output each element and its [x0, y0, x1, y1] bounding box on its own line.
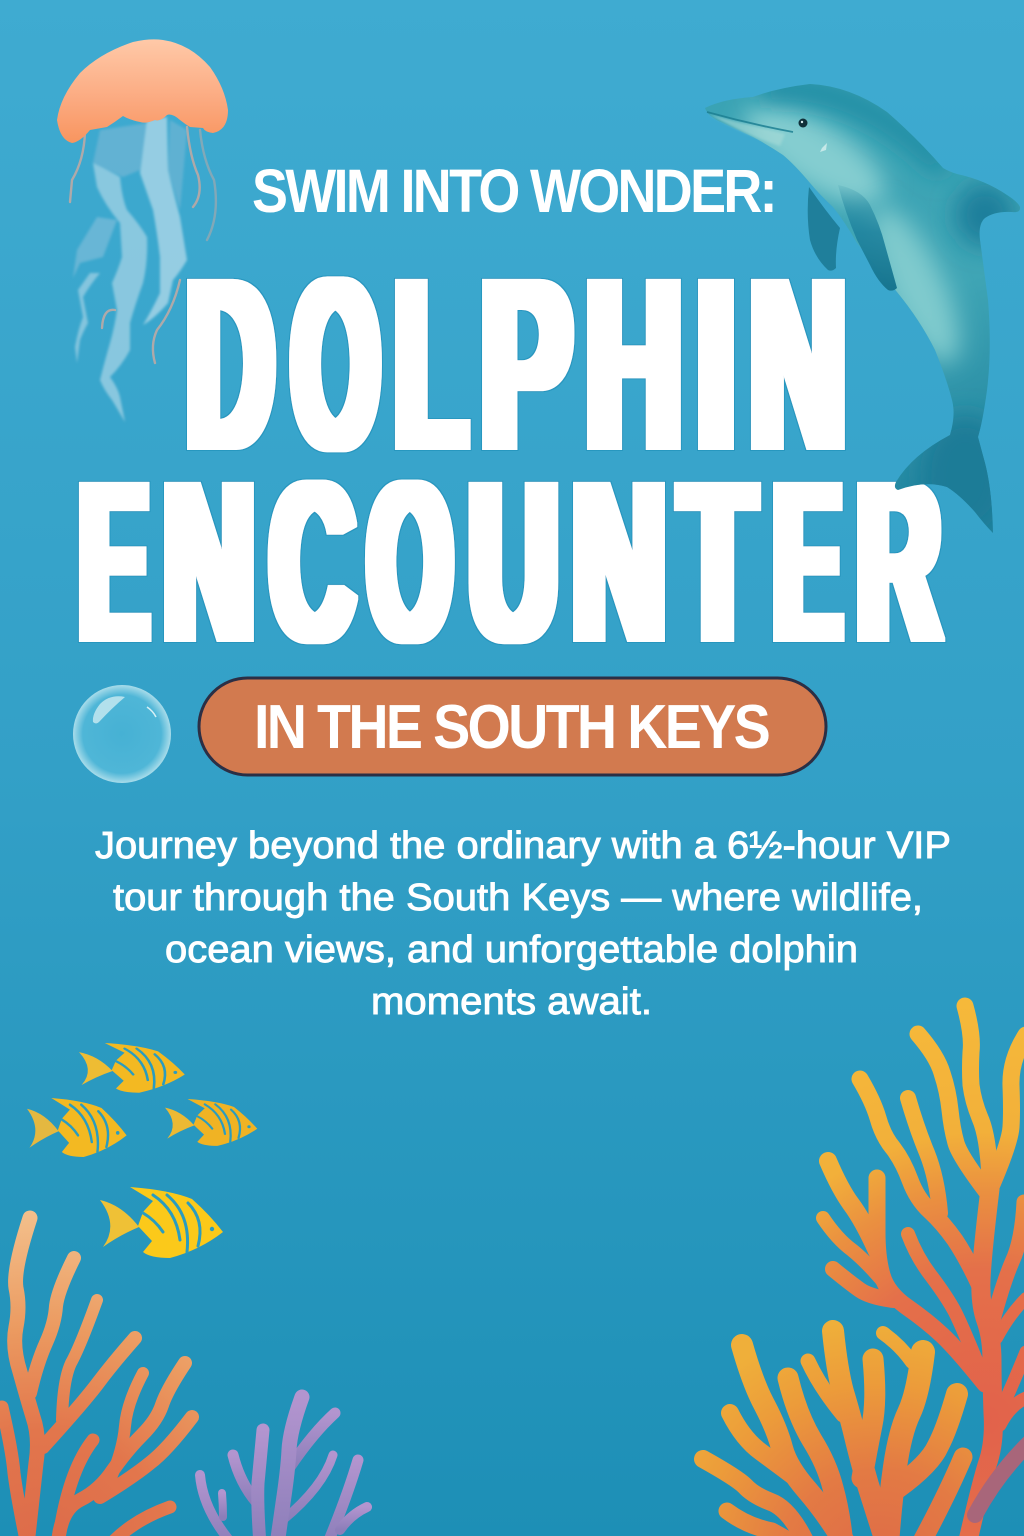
pill label: IN THE SOUTH KEYS: [254, 693, 769, 762]
title: N: [164, 436, 254, 689]
fish 4: [100, 1187, 223, 1258]
description text: tour through the South Keys — where wildlife,: [113, 877, 923, 919]
title: E: [774, 436, 840, 689]
title: E: [80, 436, 148, 689]
subtitle: SWIM INTO WONDER:: [252, 157, 775, 225]
fish 2: [27, 1098, 127, 1157]
description text: ocean views, and unforgettable dolphin: [165, 929, 858, 971]
icon: jellyfish: [57, 39, 228, 422]
icon: dolphin: [705, 84, 1020, 535]
pill: in the south keys: [199, 678, 826, 775]
title: I: [697, 229, 735, 500]
title: N: [572, 436, 666, 689]
fish 1: [79, 1043, 185, 1093]
title: O: [369, 436, 451, 689]
title: R: [857, 436, 940, 689]
title: U: [469, 436, 558, 689]
title: N: [750, 229, 846, 500]
title: [80, 229, 940, 689]
title: P: [481, 229, 571, 500]
coral: lower right: [703, 1331, 963, 1536]
title: T: [680, 436, 754, 689]
icon: bubble: [73, 685, 171, 783]
coral: lower left: [2, 1218, 192, 1536]
fish school: [27, 1043, 257, 1258]
title: C: [271, 436, 353, 689]
title: L: [395, 229, 466, 500]
description text: [95, 825, 951, 1023]
title: H: [586, 229, 682, 500]
title: D: [187, 229, 273, 500]
description text: moments await.: [371, 981, 652, 1023]
description text: Journey beyond the ordinary with a 6½-hour VIP: [95, 825, 951, 867]
coral: large right: [823, 1006, 1024, 1536]
coral: purple: [200, 1397, 367, 1536]
title: O: [292, 229, 379, 500]
fish 3: [165, 1099, 257, 1146]
